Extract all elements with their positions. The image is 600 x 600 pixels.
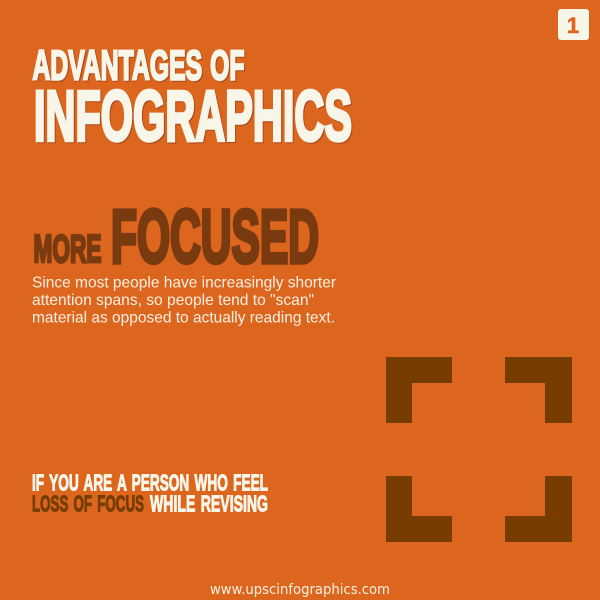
page number badge: 1 [567, 13, 579, 38]
title: ADVANTAGES OF [34, 42, 246, 90]
heading: more focused: FOCUSED [111, 194, 319, 278]
description text: attention spans, so people tend to "scan" [32, 292, 314, 309]
description text [32, 274, 337, 326]
page number badge [558, 9, 589, 40]
description text: material as opposed to actually reading text. [32, 310, 335, 326]
callout text: IF YOU ARE A PERSON WHO FEEL [32, 470, 268, 496]
footer url: www.upscinfographics.com [210, 582, 390, 598]
title [32, 42, 353, 158]
callout text [32, 470, 268, 516]
title: INFOGRAPHICS [34, 78, 352, 156]
callout text: WHILE REVISING [150, 490, 268, 516]
icon: focus brackets [386, 357, 572, 542]
heading: more focused: MORE [34, 228, 102, 271]
description text: Since most people have increasingly shorter [32, 274, 337, 292]
title: ADVANTAGES OF [32, 42, 244, 88]
callout text: LOSS OF FOCUS [32, 490, 144, 516]
title: INFOGRAPHICS [35, 78, 353, 158]
heading: more focused [34, 194, 319, 278]
